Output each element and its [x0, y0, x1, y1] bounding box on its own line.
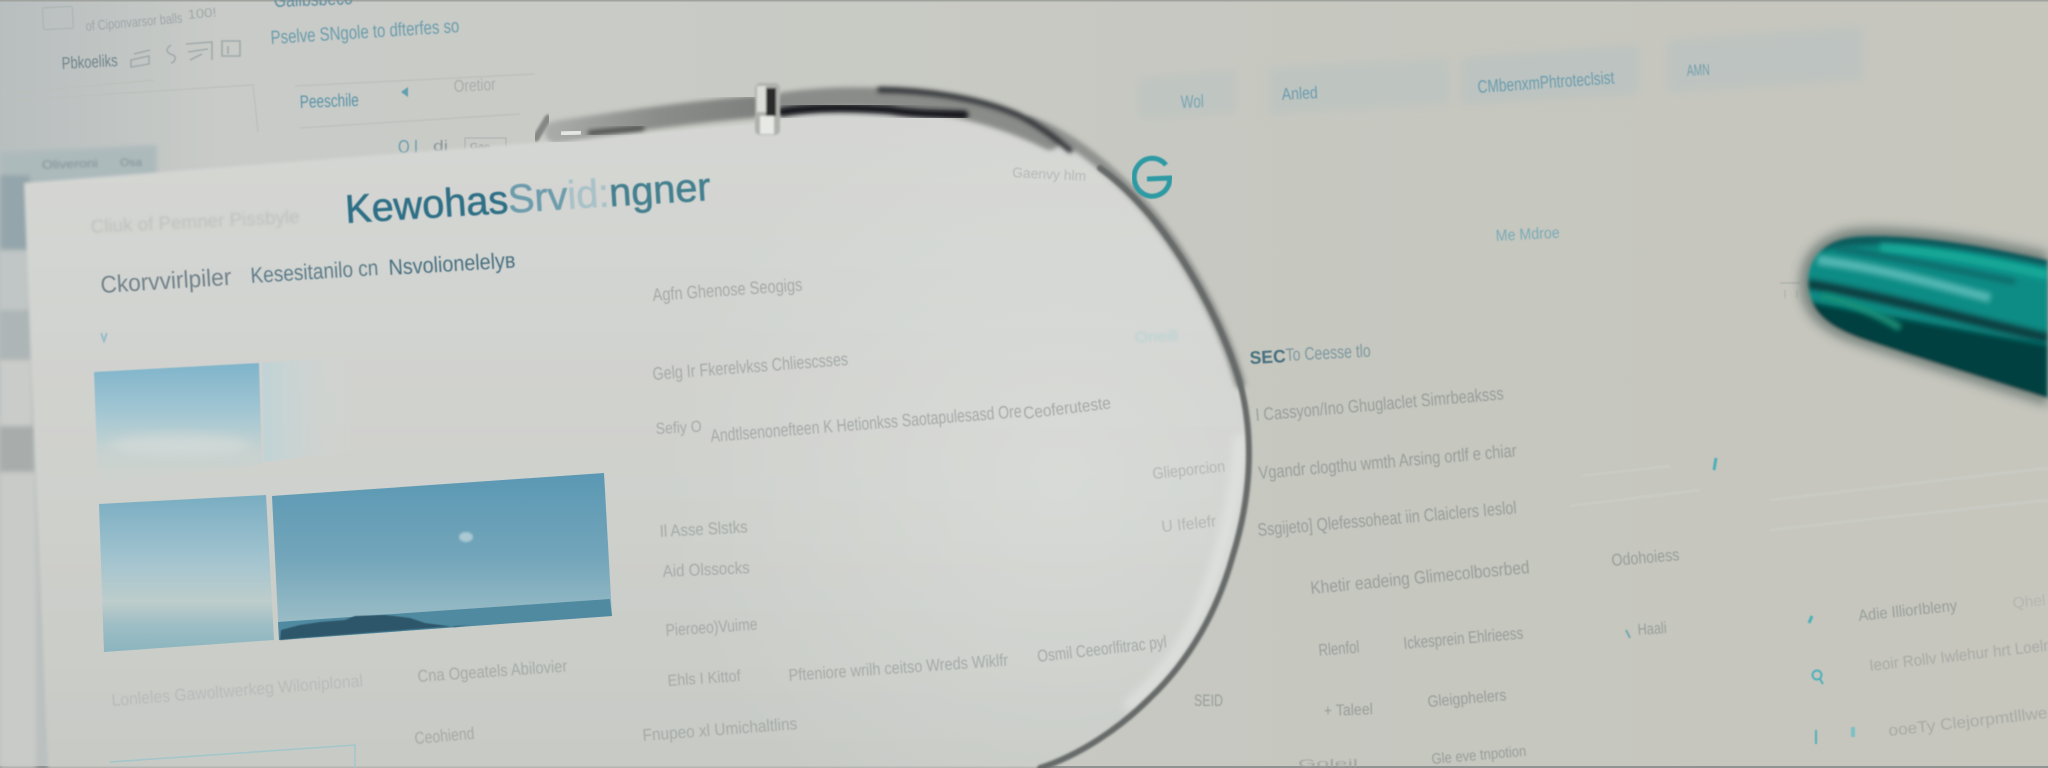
top header: faded toolbar text and icons: di	[433, 138, 448, 155]
body text outside the lens: To Ceesse tlo	[1285, 341, 1371, 365]
panel text lines: Ckorvvirlpiler	[100, 264, 232, 299]
panel text lines: Aid Olssocks	[662, 558, 750, 581]
body text outside the lens: SEC	[1249, 346, 1286, 368]
outlined box bottom left	[110, 745, 355, 768]
body text outside the lens: Adie IlliorIbleny	[1858, 598, 1958, 625]
photo: pale sky fade	[262, 355, 360, 462]
ring: stem shadow	[590, 128, 642, 133]
top header: faded toolbar text and icons: O I	[398, 137, 418, 157]
ring: grey stem	[556, 107, 752, 132]
body text outside the lens: Me Mdroe	[1495, 225, 1560, 245]
panel text lines: Agfn Ghenose Seogigs	[652, 275, 803, 305]
body text outside the lens: Khetir eadeing Glimecolbosrbed	[1309, 557, 1530, 598]
panel text lines: Osmil Ceeorlfitrac pyl	[1036, 632, 1168, 666]
top header: faded toolbar text and icons: Peeschile	[299, 90, 359, 112]
ring: blurred upper rim	[1030, 122, 1240, 383]
body text outside the lens: Rlenfol	[1318, 637, 1360, 660]
pen: lower dark area	[1811, 298, 2048, 399]
ring: grey tube	[785, 97, 1050, 140]
ring: dark upper streak	[880, 90, 1070, 150]
ring: inner glow	[1130, 440, 1240, 705]
body text outside the lens: Qhel	[2012, 592, 2046, 612]
body text outside the lens: SEID	[1194, 691, 1223, 710]
panel text lines: U Ifelefr	[1161, 513, 1218, 536]
panel icon: tick	[101, 333, 107, 341]
body text outside the lens: I Cassyon/Ino Ghuglaclet Simrbeaksss	[1255, 383, 1504, 425]
panel text lines: Ehls I Kittof	[667, 668, 742, 690]
ring: stem tip	[536, 118, 548, 138]
top header: faded toolbar text and icons: Oliveroni	[42, 156, 98, 172]
panel text lines: Cliuk of Pemner Pissbyle	[90, 207, 300, 237]
top header: faded toolbar text and icons: Oretior	[453, 75, 496, 96]
panel title: KewohasSrvid:ngner	[344, 165, 712, 232]
small teal icons	[1626, 283, 1853, 744]
panel text lines: Lonleles Gawoltwerkeg Wiloniplonal	[111, 671, 364, 710]
teal pen	[1800, 225, 2048, 410]
body text outside the lens: ooeTy Clejorpmtlllwe	[1888, 705, 2048, 740]
pen: body	[1806, 234, 2048, 400]
panel text lines	[90, 164, 1226, 748]
navigation tabs	[1138, 26, 1863, 119]
photo: sea and skyline	[272, 473, 612, 640]
pen: soft shadow	[1800, 228, 2048, 406]
pen: light central stripe	[1818, 260, 1990, 298]
left sidebar strip	[0, 145, 157, 768]
top header: faded toolbar text and icons	[0, 0, 535, 172]
top header: faded toolbar text and icons: Pselve SNgole to dfterfes so	[270, 16, 460, 49]
tab labels: Wol	[1180, 91, 1204, 112]
body text outside the lens: Ssgijeto] Qlefessoheat iin Claiclers Ieslol	[1257, 497, 1517, 540]
top header: faded toolbar text and icons: of Ciponvarsor balls	[85, 10, 183, 34]
pen: top dark edge	[1820, 240, 2048, 262]
photo grid	[94, 355, 612, 652]
body text outside the lens: Odohoiess	[1611, 545, 1680, 570]
panel text lines: Gelg Ir Fkerelvkss Chliescsses	[652, 349, 849, 384]
panel text lines: Pieroeo)Vuime	[665, 615, 758, 640]
pen: upper dark stripe	[1835, 248, 2015, 282]
ring: black lower streak	[782, 108, 964, 115]
tab labels: CMbenxmPhtroteclsist	[1477, 67, 1615, 97]
body text outside the lens: Vgandr clogthu wmth Arsing ortlf e chiar	[1258, 440, 1517, 483]
body text outside the lens	[1194, 225, 2048, 768]
body text outside the lens: Ickesprein Ehlrieess	[1403, 624, 1524, 653]
pen: dark band	[1808, 284, 2048, 338]
panel text lines: Gaenvy hlm	[1012, 164, 1087, 184]
photo: sky and haze	[99, 495, 274, 652]
body text outside the lens: Gleigphelers	[1427, 687, 1507, 711]
pen: upper bright stripe	[1880, 248, 2048, 275]
icon: teal G logo	[1134, 158, 1170, 196]
magnifying glass ring	[536, 90, 1249, 768]
panel text lines: Fnupeo xl Umichaltlins	[642, 714, 798, 745]
top header: faded toolbar text and icons: Gae	[470, 142, 491, 151]
panel text lines: Sefiy O	[655, 419, 702, 438]
pen: green reflection	[1822, 296, 1900, 328]
body text outside the lens: + Taleel	[1324, 701, 1373, 720]
panel text lines: Kesesitanilo cn	[250, 255, 379, 288]
lens highlight	[970, 419, 1151, 588]
panel text lines: Pfteniore wrilh ceitso Wreds Wiklfr	[788, 651, 1009, 685]
panel text lines: Cna Ogeatels Abilovier	[417, 657, 568, 686]
panel text lines: Andtlsenonefteen K Hetionkss Saotapulesasd Ore	[710, 401, 1022, 446]
tab labels: AMN	[1686, 62, 1710, 80]
ring: metal clamp	[755, 83, 780, 135]
ring: lens rim	[1040, 168, 1249, 768]
panel text lines: Ceoferuteste	[1022, 393, 1112, 423]
body text outside the lens: Gle eve tnpotion	[1431, 743, 1527, 768]
body text outside the lens: Haali	[1637, 620, 1667, 639]
top header: faded toolbar text and icons: 100!	[187, 5, 217, 22]
tab labels	[1180, 62, 1710, 112]
tab labels: Anled	[1281, 83, 1318, 104]
ring: stem light spot	[562, 132, 580, 134]
photo: sky top left	[94, 363, 262, 482]
faint rules right side	[1570, 466, 2048, 530]
top header: faded toolbar text and icons: Pbkoeliks	[61, 51, 118, 73]
panel text lines: Oneill	[1135, 328, 1178, 346]
panel text lines: Ceohiend	[414, 724, 475, 748]
panel seen through the lens	[24, 104, 1249, 768]
panel text lines: Nsvolionelelyв	[388, 248, 516, 280]
panel text lines: Glieporcion	[1152, 458, 1226, 483]
top header: faded toolbar text and icons: Osa	[120, 157, 143, 169]
panel text lines: Il Asse Slstks	[659, 517, 748, 541]
